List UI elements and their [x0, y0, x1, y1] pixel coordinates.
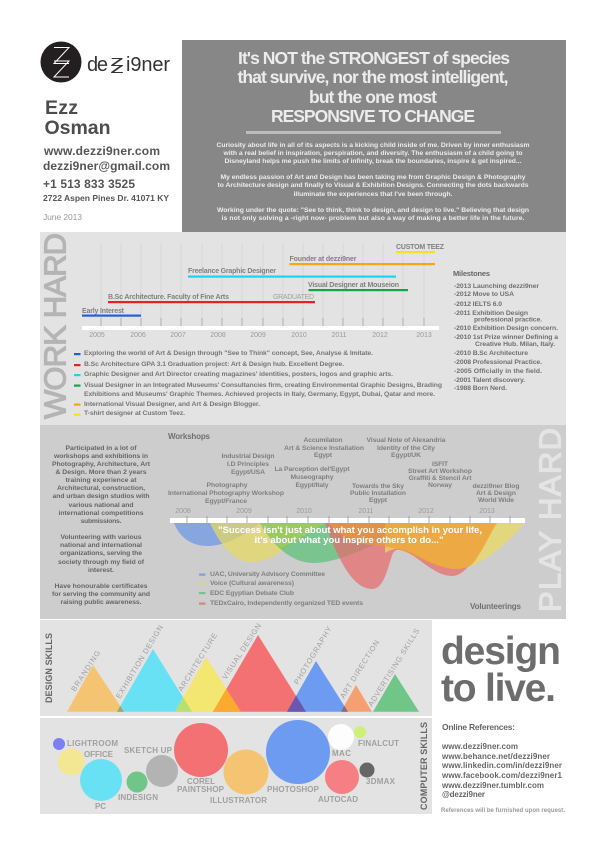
logo: dezzi9ner: z	[110, 59, 124, 76]
contact details	[43, 144, 170, 203]
quote: "Success isn't just about what you accomplish in your life,	[218, 525, 482, 536]
year labels: 2008	[210, 332, 226, 339]
timeline legend: Exhibitions and Museums' Graphic Themes. Achieved projects in Italy, Germany, Egypt, Dubai, Qatar and more.	[84, 391, 435, 398]
skill labels: BRANDING	[69, 649, 102, 693]
online references: www.linkedin.com/in/dezzi9ner	[441, 761, 562, 770]
workshop labels: Egypt/USA	[231, 469, 265, 476]
play hard vertical title: PLAY HARD	[532, 428, 568, 612]
skill labels: ADVERTISING SKILLS	[366, 627, 421, 708]
activities text block: society through my field of	[58, 559, 145, 566]
bubble labels: PAINTSHOP	[177, 785, 225, 794]
workshop labels: Accumilaton	[304, 437, 342, 444]
workshops heading: Workshops	[168, 432, 211, 441]
statement body text: Working under the quote: "See to think, think to design, and design to live." Believing that design	[217, 207, 529, 214]
activities text block: international competitions	[58, 510, 144, 517]
workshop labels: ISFIT	[432, 461, 449, 468]
bar: architecture degree: GRADUATED	[273, 294, 314, 301]
workshop labels: Egypt/UK	[391, 452, 421, 459]
activities text block: Volunteering with various	[60, 534, 142, 541]
bubble labels: AUTOCAD	[318, 795, 358, 804]
bubble labels: SKETCH UP	[124, 746, 173, 755]
workshop labels: Egypt/Italy	[296, 482, 329, 489]
online references: Online References:	[442, 722, 515, 732]
bar: founder: Founder at dezzi9ner	[290, 256, 357, 263]
year labels: 2005	[89, 332, 105, 339]
skill labels: ART DIRECTION	[338, 638, 381, 700]
volunteering legend	[199, 571, 363, 607]
online references: www.facebook.com/dezzi9ner1	[441, 771, 563, 780]
activities text block: Have honourable certificates	[54, 583, 148, 590]
statement heading	[238, 48, 510, 134]
timeline legend: International Visual Designer, and Art & Design Blogger.	[84, 401, 260, 408]
statement heading: but the one most	[309, 87, 437, 107]
online references: www.dezzi9ner.tumblr.com	[441, 781, 544, 790]
milestones list: -1988 Born Nerd.	[454, 385, 507, 392]
workshop labels: Egypt	[369, 497, 388, 504]
online references: www.behance.net/dezzi9ner	[441, 752, 550, 761]
statement body text	[216, 142, 530, 222]
volunteering legend: EDC Egyptian Debate Club	[210, 590, 294, 597]
workshop labels: Visual Note of Alexandria	[366, 437, 446, 444]
workshop labels	[168, 437, 520, 505]
activities text block: for serving the community and	[52, 591, 150, 598]
workshop labels: Norway	[428, 482, 452, 489]
bubble labels: 3DMAX	[366, 777, 396, 786]
milestones list: -2010 Exhibition Design concern.	[454, 325, 558, 332]
quote	[218, 525, 482, 546]
references note: References will be furnished upon request.	[441, 808, 565, 814]
timeline legend: Graphic Designer and Art Director creating magazines' identities, posters, logos and graphic arts.	[84, 371, 393, 378]
skill labels	[69, 622, 421, 708]
statement body text: to Architecture design and finally to Visual & Exhibition Designs. Connecting the dots backwards	[218, 182, 529, 189]
workshop year labels: 2010	[296, 508, 312, 515]
name heading: Ezz	[45, 97, 78, 119]
computer skills vertical title: COMPUTER SKILLS	[419, 722, 429, 810]
logo: dezzi9ner: z	[110, 52, 124, 69]
workshop labels: International Photography Workshop	[168, 490, 284, 497]
workshop labels: Identity of the City	[377, 445, 435, 452]
workshop labels: Graffiti & Stencil Art	[408, 475, 472, 482]
bar: visual designer: Visual Designer at Mouseion	[308, 282, 399, 289]
workshop labels: Egypt/France	[205, 498, 247, 505]
activities text block: & Design. More than 2 years	[56, 469, 147, 476]
bar: architecture degree	[108, 294, 315, 303]
year labels: 2013	[416, 332, 432, 339]
statement body text: is not only solving a -right now- problem but also a way of making a better life in the future.	[222, 215, 525, 222]
milestones list: -2008 Professional Practice.	[454, 359, 542, 366]
panel: design skills	[40, 620, 432, 716]
statement heading: that survive, nor the most intelligent,	[238, 67, 508, 87]
timeline legend: Visual Designer in an Integrated Museums' Consultancies firm, creating Environmental Graphic Designs, Brading	[84, 382, 442, 389]
online references: @dezzi9ner	[442, 790, 485, 799]
workshop labels: Street Art Workshop	[408, 468, 472, 475]
workshop year labels: 2009	[236, 508, 252, 515]
year labels	[89, 332, 432, 339]
timeline legend: T-shirt designer at Custom Teez.	[84, 410, 185, 417]
milestones list: Creative Hub. Milan, Italy.	[475, 341, 555, 348]
skill labels: PHOTOGRAPHY	[292, 625, 334, 686]
statement body text: Disneyland helps me push the limits of infinity, break the boundaries, inspire & get inspired...	[224, 158, 522, 165]
slogan: design to live: to live.	[441, 667, 556, 710]
online references	[441, 722, 563, 799]
milestones list: professional practice.	[474, 316, 542, 324]
volunteering legend: TEDxCairo, Independently organized TED events	[210, 600, 363, 607]
slogan: design to live: design	[441, 630, 561, 673]
workshop labels: dezzi9ner Blog	[472, 483, 520, 490]
skill labels: EXHIBITION DESIGN	[114, 623, 165, 700]
panel: statement	[182, 40, 566, 232]
activities text block: raising public awareness.	[60, 599, 142, 606]
design skills vertical title: DESIGN SKILLS	[44, 633, 54, 703]
workshop year labels: 2011	[358, 508, 374, 515]
bar: early interest: Early Interest	[82, 308, 125, 315]
milestones list: -2013 Launching dezzi9ner	[454, 283, 539, 290]
statement body text: My endless passion of Art and Design has been taking me from Graphic Design & Photography	[220, 174, 526, 181]
activities text block: Participated in a lot of	[66, 445, 137, 452]
contact details: 2722 Aspen Pines Dr. 41071 KY	[43, 193, 169, 203]
volunteering legend: UAC, University Advisory Committee	[210, 571, 325, 578]
year labels: 2007	[170, 332, 186, 339]
workshop labels: Public Installation	[350, 490, 406, 497]
milestones list: -2010 B.Sc Architecture	[454, 350, 528, 357]
workshop labels: Art & Design	[476, 490, 516, 497]
milestones list: -2011 Exhibition Design	[454, 310, 528, 317]
panel: computer skills	[40, 718, 432, 814]
slogan: design to live	[441, 630, 561, 710]
work hard vertical title: WORK HARD	[38, 233, 72, 419]
milestones list: -2010 1st Prize winner Defining a	[454, 334, 558, 341]
date: June 2013	[43, 212, 82, 222]
activities text block: interest.	[88, 567, 114, 574]
timeline legend	[74, 350, 442, 417]
milestones list: -2012 IELTS 6.0	[454, 301, 502, 308]
activities text block: national and international	[60, 542, 142, 549]
workshop labels: Museography	[290, 474, 334, 481]
statement body text: with a real belief in inspiration, perspiration, and diversity. The enthusiasm of a child going to	[222, 150, 522, 157]
workshop year labels	[175, 508, 495, 515]
activities text block: submissions.	[80, 518, 122, 525]
statement heading: It's NOT the STRONGEST of species	[238, 48, 510, 68]
bar: custom teez: CUSTOM TEEZ	[396, 244, 445, 251]
activities text block: Architectural, construction,	[57, 485, 145, 492]
workshop year labels: 2008	[175, 508, 191, 515]
year labels: 2009	[250, 332, 266, 339]
workshop labels: I.D Principles	[227, 461, 269, 468]
milestones list	[453, 269, 558, 392]
skill labels: VISUAL DESIGN	[220, 622, 263, 681]
volunteering wave chart	[170, 516, 525, 589]
name heading	[44, 97, 110, 139]
milestones list: -2005 Officially in the field.	[454, 368, 542, 375]
triangle chart	[67, 635, 419, 712]
bar: early interest	[82, 308, 141, 317]
activities text block: workshops and exhibitions in	[53, 453, 148, 460]
bubble labels: ILLUSTRATOR	[210, 796, 267, 805]
career timeline chart	[82, 243, 445, 339]
logo: dezzi9ner: de	[87, 54, 108, 76]
workshop labels: Art & Science Installation	[284, 445, 364, 452]
bubble labels: PHOTOSHOP	[267, 785, 320, 794]
contact details: +1 513 833 3525	[43, 177, 135, 191]
workshop labels: La Parception del'Egypt	[274, 466, 350, 473]
panel: work hard	[38, 232, 566, 425]
volunteerings heading: Volunteerings	[470, 602, 522, 611]
volunteering legend: Voice (Cultural awareness)	[210, 580, 294, 587]
workshop year labels: 2012	[418, 508, 434, 515]
activities text block: and urban design studios with	[52, 493, 150, 500]
bubble labels: COREL	[187, 777, 215, 786]
logo: dezzi9ner: i9ner	[126, 54, 170, 76]
activities text block: Photography, Architecture, Art	[52, 461, 151, 468]
workshop labels: Towards the Sky	[352, 483, 404, 490]
name heading: Osman	[44, 117, 110, 139]
activities text block: various national and	[68, 502, 134, 509]
bubble labels: LIGHTROOM	[67, 739, 118, 748]
bubble labels: INDESIGN	[118, 793, 158, 802]
year labels: 2006	[130, 332, 146, 339]
logo: dezzi9ner	[40, 42, 170, 82]
milestones list: -2001 Talent discovery.	[454, 377, 525, 384]
statement body text: Curiosity about life in all of its aspects is a kicking child inside of me. Driven by inner enthusiasm	[216, 142, 530, 149]
panel: play hard	[40, 425, 568, 619]
bar: visual designer	[308, 282, 408, 291]
activities text block: training experience at	[66, 477, 137, 484]
workshop labels: Industrial Design	[222, 453, 274, 460]
contact details: dezzi9ner@gmail.com	[43, 159, 170, 173]
timeline legend: Exploring the world of Art & Design through "See to Think" concept, See, Analyse & Imitate.	[84, 350, 373, 357]
statement heading: RESPONSIVE TO CHANGE	[271, 106, 475, 126]
workshop year labels: 2013	[479, 508, 495, 515]
bubble chart	[53, 720, 374, 801]
statement body text: illuminate the experiences that I've been through.	[294, 191, 453, 198]
bubble labels	[67, 739, 399, 811]
year labels: 2012	[372, 332, 388, 339]
workshop labels: Egypt	[314, 452, 333, 459]
bubble labels: PC	[95, 802, 106, 811]
activities text block	[52, 445, 151, 606]
contact details: www.dezzi9ner.com	[43, 144, 160, 158]
year labels: 2011	[331, 332, 347, 339]
quote: it's about what you inspire others to do..."	[254, 535, 444, 546]
activities text block: organizations, serving the	[60, 550, 142, 557]
bubble labels: MAC	[332, 749, 351, 758]
bubble labels: FINALCUT	[358, 739, 399, 748]
workshop labels: World Wide	[478, 497, 514, 504]
timeline legend: B.Sc Architecture GPA 3.1 Graduation project: Art & Design hub. Excellent Degree.	[84, 361, 344, 368]
bubble labels: OFFICE	[84, 750, 114, 759]
bar: freelance designer: Freelance Graphic Designer	[188, 268, 276, 275]
online references: www.dezzi9ner.com	[441, 742, 518, 751]
workshop labels: Photography	[206, 482, 248, 489]
year labels: 2010	[291, 332, 307, 339]
milestones list: Milestones	[453, 269, 490, 278]
milestones list: -2012 Move to USA	[454, 291, 514, 298]
skill labels: ARCHITECTURE	[176, 631, 219, 693]
bar: architecture degree: B.Sc Architecture. Faculty of Fine Arts	[108, 294, 229, 301]
